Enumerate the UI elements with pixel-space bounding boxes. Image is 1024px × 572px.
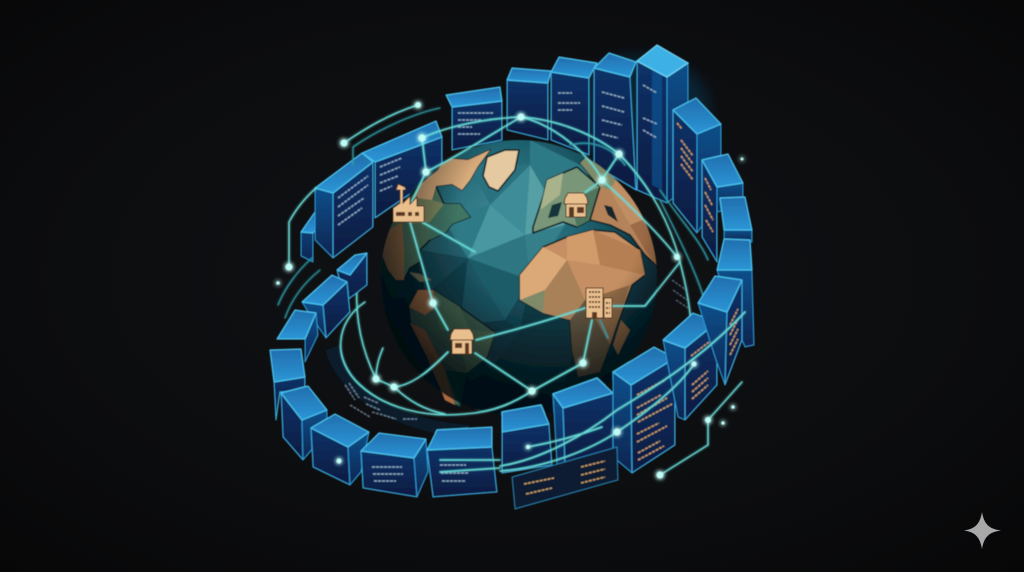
glow behind towers bbox=[570, 55, 710, 165]
block: top bbox=[507, 68, 551, 140]
front network lines bbox=[440, 312, 745, 475]
globe shade bbox=[381, 140, 657, 416]
panel: rear ring of data blocks bbox=[301, 45, 754, 347]
continent: Greenland bbox=[483, 150, 519, 191]
block: right tall bbox=[698, 276, 742, 385]
block: top tall bbox=[551, 57, 597, 155]
block: left 1 bbox=[302, 275, 350, 338]
block: left 2 bbox=[277, 310, 318, 362]
block: bottom 3 bbox=[361, 433, 428, 497]
block: tower with amber text bbox=[673, 98, 721, 233]
continent: North America bbox=[380, 150, 490, 280]
panel: front ring of data blocks bbox=[270, 253, 742, 497]
block: bottom left 2 bbox=[311, 414, 369, 485]
block: bottom left 1 bbox=[281, 386, 327, 460]
block: right 3 bbox=[717, 239, 754, 347]
block: far left upper bbox=[337, 253, 367, 302]
icon: store South America bbox=[450, 329, 474, 354]
block: top label bbox=[446, 87, 502, 150]
block: tallest tower bbox=[637, 45, 688, 203]
network lines over globe bbox=[341, 117, 712, 415]
block: tower bbox=[594, 53, 636, 190]
block: bottom 5 bbox=[502, 405, 552, 473]
block: upper left long bbox=[362, 121, 442, 218]
illustration group bbox=[270, 45, 754, 509]
block: large amber text bbox=[613, 347, 675, 473]
block: upper left small bbox=[301, 212, 331, 262]
block: right bbox=[702, 154, 743, 262]
ocean low poly facets bbox=[378, 140, 590, 420]
Caribbean islands bbox=[409, 272, 432, 282]
back orbit lines bbox=[278, 105, 708, 318]
continent: Asia bbox=[580, 153, 658, 267]
icon: store Europe bbox=[564, 193, 588, 217]
block: upper left wide bbox=[315, 153, 373, 258]
block: bottom 4 bbox=[427, 427, 497, 497]
inner data strip bbox=[325, 280, 688, 437]
icon: office building bbox=[586, 288, 612, 318]
panel: bottom caption card bbox=[512, 447, 618, 509]
block: left 3 bbox=[270, 349, 305, 420]
block: right amber text bbox=[663, 313, 717, 420]
block: bottom 6 bbox=[553, 378, 613, 465]
block: right 2 bbox=[720, 197, 752, 242]
globe bbox=[378, 140, 658, 420]
continent: South America bbox=[409, 290, 495, 407]
icon: factory bbox=[393, 184, 424, 222]
continent: Africa bbox=[520, 230, 645, 377]
icon: four-point sparkle watermark bbox=[964, 512, 1001, 549]
network nodes bbox=[276, 102, 744, 478]
continent: Europe bbox=[533, 167, 600, 233]
